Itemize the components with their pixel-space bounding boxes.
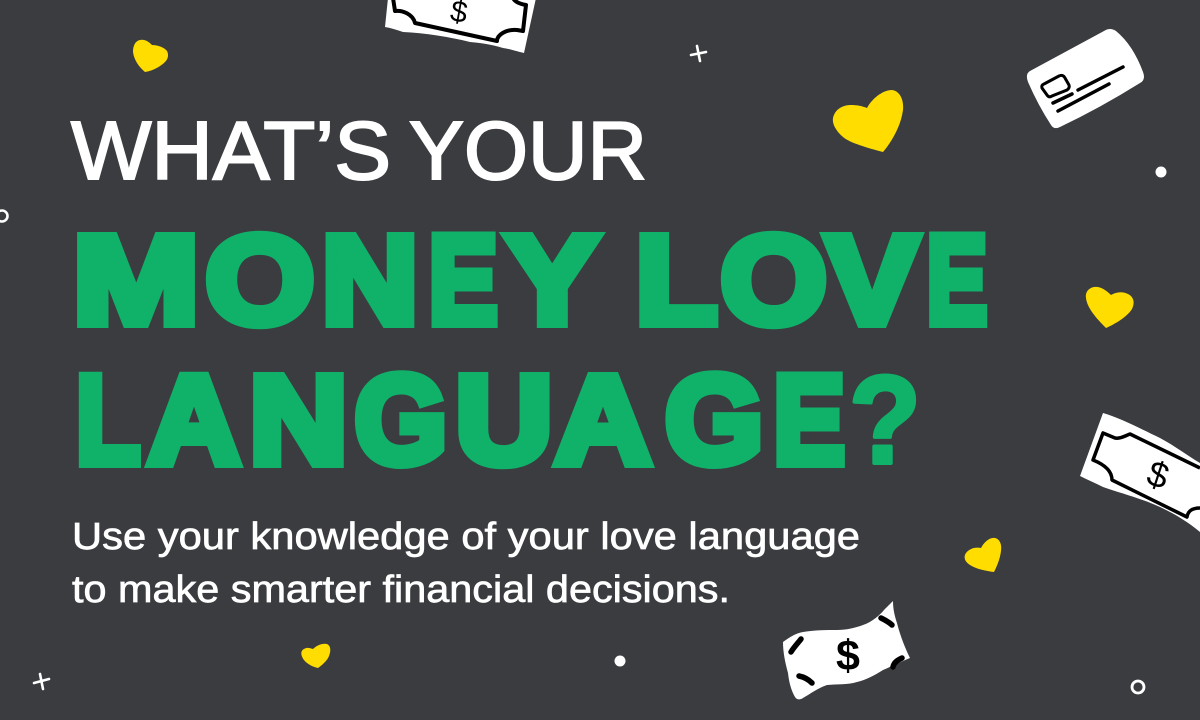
- title line: money love: Y: [506, 211, 597, 350]
- title line: language: G: [355, 351, 447, 490]
- icon: plus top: [691, 46, 706, 61]
- title line: money love: O: [721, 211, 827, 350]
- icon: heart lower right: [965, 538, 1001, 572]
- title line: language: A: [148, 351, 240, 490]
- title line: money love: E: [927, 211, 987, 350]
- title line: language: G: [665, 351, 763, 490]
- title line: language: ?: [849, 351, 921, 490]
- title line: language: A: [555, 351, 651, 490]
- title line: money love: E: [429, 211, 498, 350]
- title line: what's your: [71, 104, 647, 197]
- title line: what's your: YOUR: [409, 104, 647, 197]
- icon: dot right: [1156, 166, 1166, 178]
- icon: ring bottom right: [1132, 681, 1144, 693]
- icon: waving dollar bill: [783, 601, 910, 699]
- title line: money love: N: [322, 211, 418, 350]
- icon: dollar bill right: [1080, 413, 1200, 532]
- icon: plus bottom left: [34, 674, 49, 689]
- title line: money love: L: [636, 211, 717, 350]
- icon: heart bottom: [301, 644, 330, 668]
- icon: waving dollar bill: $: [836, 632, 860, 680]
- subtitle: Use your knowledge of your love language: [72, 516, 860, 558]
- title line: money love: O: [206, 211, 314, 350]
- subtitle: [72, 516, 860, 611]
- title line: language: N: [250, 351, 348, 490]
- title line: money love: M: [73, 211, 199, 350]
- icon: dot bottom: [614, 656, 626, 666]
- title line: language: U: [456, 351, 552, 490]
- icon: credit card: [1027, 29, 1144, 128]
- title line: language: L: [76, 351, 140, 490]
- icon: heart large: [833, 90, 903, 152]
- icon: dollar bill right: $: [1142, 452, 1174, 497]
- icon: heart top left: [133, 40, 168, 72]
- icon: ring left: [0, 210, 8, 222]
- title line: language: E: [774, 351, 845, 490]
- title line: money love: V: [826, 211, 918, 350]
- title line: what's your: WHAT’S: [71, 104, 391, 197]
- subtitle: to make smarter financial decisions.: [72, 569, 730, 611]
- icon: dollar bill top: [385, 0, 536, 53]
- icon: heart right: [1086, 287, 1134, 328]
